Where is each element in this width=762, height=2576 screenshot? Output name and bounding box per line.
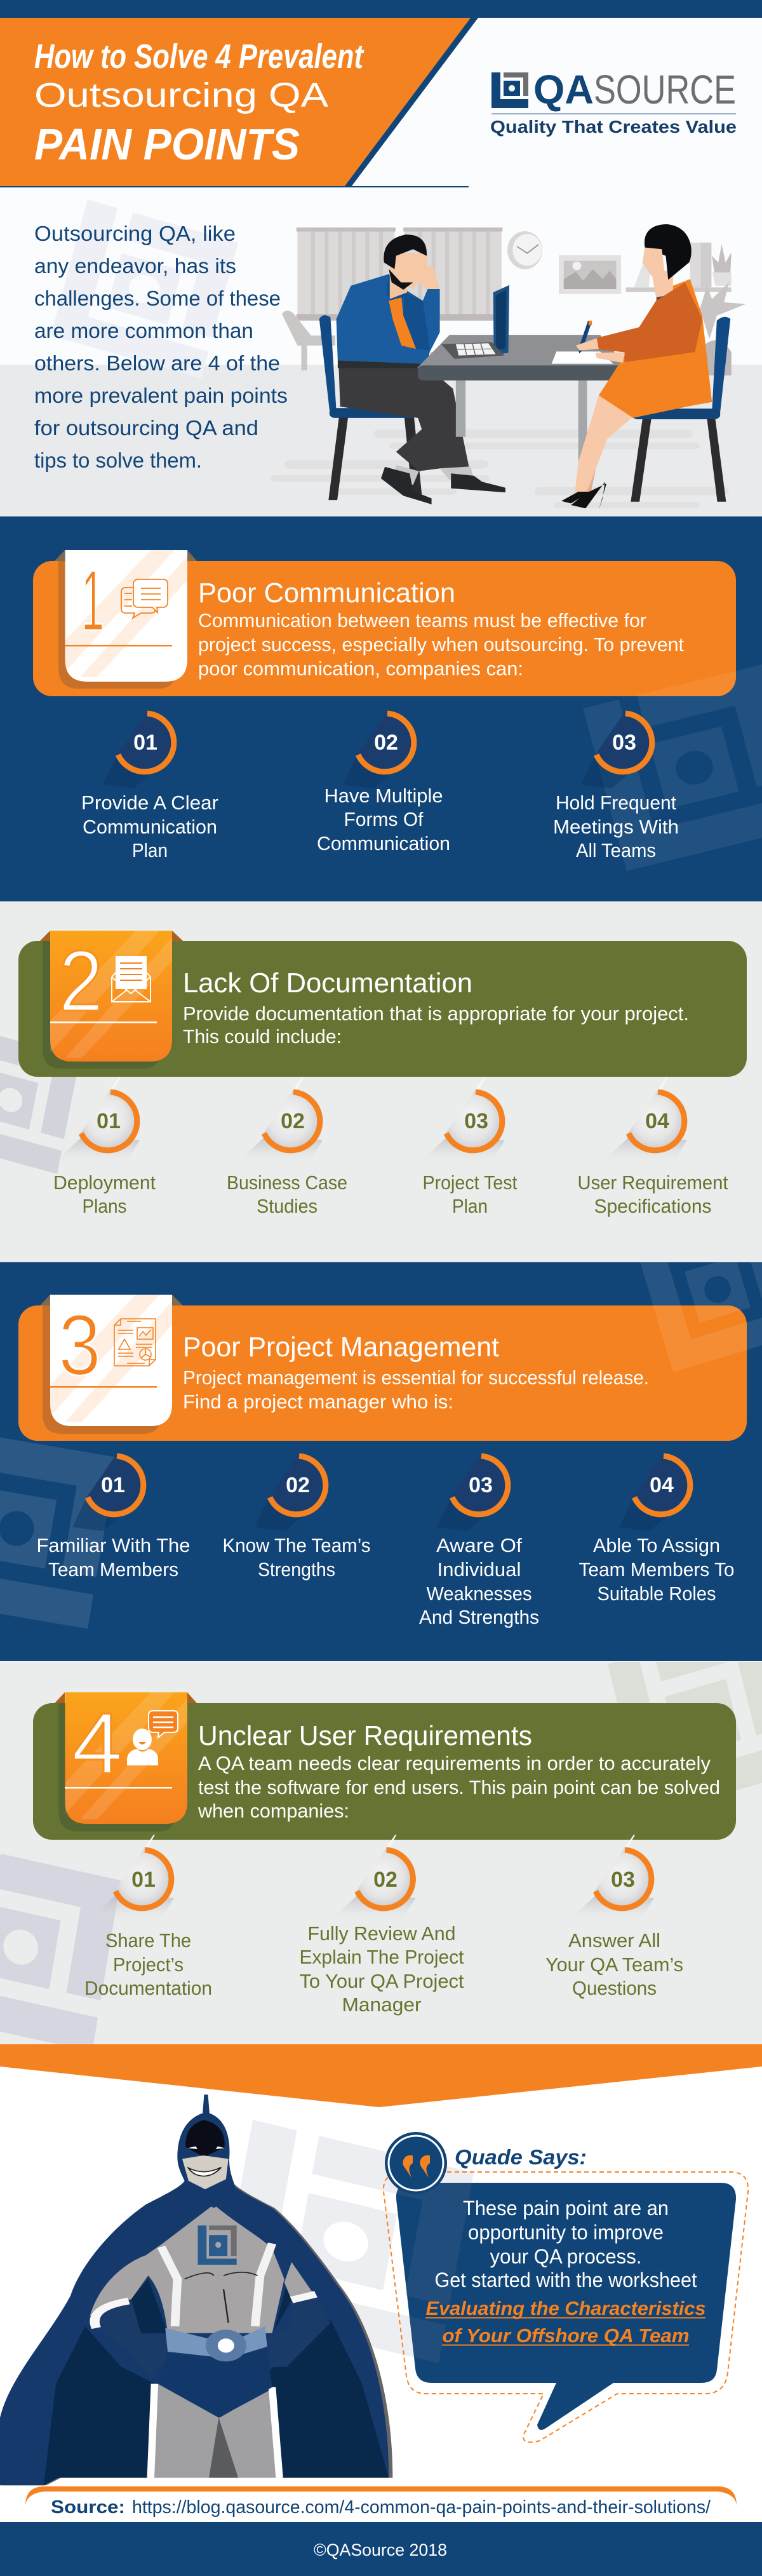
source strip: Source: [51, 2497, 125, 2518]
number card 1: 1 [81, 552, 104, 649]
item 4.2: Fully Review And [307, 1922, 456, 1945]
intro text: Outsourcing QA, like [34, 222, 236, 245]
item 1.3: All Teams [576, 839, 656, 861]
text: poor communication description [198, 609, 684, 680]
callout text: Get started with the worksheet [434, 2269, 697, 2291]
briefs [158, 2350, 272, 2418]
item 2.1: 01 [97, 1109, 121, 1133]
item 1.1: 01 [133, 731, 157, 755]
item 3.4: 04 [650, 1473, 674, 1497]
title: Outsourcing QA [34, 76, 328, 114]
item 2.2: Business Case [227, 1171, 347, 1194]
item 3.3: Weaknesses [427, 1582, 532, 1605]
item 3.3: And Strengths [419, 1606, 539, 1628]
footer: ©QASource 2018 [314, 2540, 447, 2559]
item 1.3: 03 [612, 731, 636, 755]
footer [0, 2522, 762, 2576]
number card 3 [50, 1295, 172, 1426]
text: poor project management description [183, 1366, 649, 1413]
callout text: your QA process. [490, 2245, 641, 2268]
item 3.1: 01 [101, 1473, 125, 1497]
item 3.3 [419, 1453, 539, 1628]
watermark: section 3 [0, 1207, 762, 1629]
icon: person with speech bubble [127, 1711, 178, 1765]
item 3.2: 02 [286, 1473, 310, 1497]
source strip: https://blog.qasource.com/4-common-qa-pain-points-and-their-solutions/ [132, 2497, 711, 2518]
panel: lack of documentation banner [18, 931, 747, 1077]
item 4.1: Documentation [84, 1977, 212, 1999]
callout text [425, 2197, 706, 2347]
item 3.4: Able To Assign [593, 1534, 720, 1556]
callout dashed outline [384, 2172, 748, 2442]
intro text: for outsourcing QA and [34, 416, 258, 440]
header banner [0, 0, 762, 187]
number card 2 [50, 931, 172, 1062]
item 3.3: Aware Of [436, 1534, 522, 1556]
illustration: office meeting [271, 224, 746, 510]
floor [0, 365, 762, 516]
panel: unclear user requirements banner [33, 1692, 736, 1840]
item 1.2: Have Multiple [324, 785, 443, 807]
blinds [297, 227, 502, 321]
number card 1 [65, 550, 187, 682]
man on chair [319, 234, 505, 504]
number card 4: 4 [72, 1695, 123, 1791]
item 2.3: Plan [452, 1195, 488, 1217]
picture frame [559, 255, 621, 294]
item 2.4 [578, 1077, 728, 1217]
item 4.3: Answer All [568, 1929, 660, 1952]
watermark: intro [51, 199, 238, 379]
item 3.1: Familiar With The [37, 1534, 190, 1556]
table [417, 335, 628, 480]
item 4.3: Your QA Team’s [545, 1953, 683, 1976]
clock [507, 231, 542, 269]
text: unclear user requirements description: test the software for end users. This pain point can be solved [198, 1776, 720, 1798]
item 2.4: Specifications [594, 1195, 711, 1217]
callout text: Evaluating the Characteristics [425, 2297, 706, 2319]
heading: lack of documentation: Lack Of Documentation [183, 968, 472, 999]
text: lack of documentation description [183, 1002, 689, 1048]
floor shadows [271, 429, 729, 508]
item 1.2: Communication [317, 832, 450, 854]
item 4.2: Explain The Project [300, 1946, 464, 1968]
item 4.1: 01 [131, 1868, 156, 1892]
item 1.3: Hold Frequent [556, 792, 676, 814]
number card 2: 2 [59, 933, 103, 1029]
intro text: are more common than [34, 319, 253, 342]
watermark: section 2 [0, 1035, 76, 1174]
intro text [34, 222, 288, 472]
item 3.1 [37, 1453, 190, 1581]
item 4.3: 03 [611, 1868, 635, 1892]
item 2.4: 04 [645, 1109, 669, 1133]
item 4.2: Manager [342, 1993, 422, 2016]
icon: chat bubbles [121, 579, 168, 618]
item 3.4 [579, 1453, 734, 1605]
heading: poor project management: Poor Project Management [183, 1332, 499, 1363]
item 3.4: Suitable Roles [597, 1582, 716, 1605]
cape [0, 2181, 389, 2485]
icon: envelope [112, 957, 150, 1002]
logo: QASource: Quality That Creates Value [490, 117, 737, 137]
title: PAIN POINTS [34, 119, 300, 169]
item 2.1 [52, 1077, 156, 1217]
couch [282, 311, 335, 370]
heading: poor communication: Poor Communication [198, 577, 455, 609]
torso [90, 2204, 284, 2333]
text: unclear user requirements description: A QA team needs clear requirements in order to accurately [198, 1752, 711, 1774]
item 2.1: Deployment [53, 1171, 156, 1194]
item 3.2: Strengths [258, 1558, 335, 1581]
section 3 background [0, 1262, 762, 1661]
chest logo [197, 2225, 237, 2265]
text: poor project management description: Find a project manager who is: [183, 1391, 453, 1413]
source strip [25, 2486, 737, 2518]
item 4.3: Questions [572, 1977, 657, 1999]
woman on chair [561, 224, 730, 510]
watermark: section 1 [583, 664, 762, 871]
number card 4 [65, 1692, 187, 1824]
item 2.2: 02 [281, 1109, 305, 1133]
gloves and cuffs [92, 2299, 168, 2377]
item 3.2 [222, 1453, 371, 1581]
callout text: opportunity to improve [468, 2221, 664, 2244]
laptop [441, 285, 509, 359]
icon: quote circle [385, 2132, 447, 2194]
watermark: section 4 [0, 1620, 762, 2052]
logo: QASource: QA [533, 67, 594, 112]
item 2.2 [227, 1077, 347, 1217]
item 1.2 [317, 711, 450, 854]
item 4.2: 02 [373, 1868, 398, 1892]
item 4.1: Project’s [113, 1953, 184, 1976]
callout bubble [396, 2183, 736, 2430]
item 2.2: Studies [257, 1195, 318, 1217]
intro text: more prevalent pain points [34, 384, 288, 407]
item 2.3: 03 [464, 1109, 488, 1133]
intro text: tips to solve them. [34, 448, 202, 472]
item 3.3: 03 [469, 1473, 493, 1497]
item 1.3 [553, 711, 679, 861]
title: How to Solve 4 Prevalent [34, 37, 364, 76]
item 2.3: Project Test [423, 1171, 518, 1194]
item 3.3: Individual [437, 1558, 521, 1581]
text: poor communication description: project success, especially when outsourcing. To prevent [198, 633, 684, 656]
text: poor communication description: poor communication, companies can: [198, 657, 523, 680]
heading: Quade Says: Quade Says: [455, 2145, 587, 2169]
heading: unclear user requirements: Unclear User Requirements [198, 1720, 532, 1751]
belt [165, 2326, 267, 2361]
item 1.2: 02 [374, 731, 398, 755]
item 2.4: User Requirement [578, 1171, 728, 1194]
section 2 background [0, 902, 762, 1262]
watermark: closing section [218, 2120, 474, 2363]
callout text: of Your Offshore QA Team [442, 2324, 690, 2347]
section 4 background [0, 1662, 762, 2044]
item 3.1: Team Members [48, 1558, 178, 1581]
item 4.2 [300, 1835, 464, 2016]
closing section background with orange chevron [0, 2044, 762, 2522]
text: poor communication description: Communication between teams must be effective for [198, 609, 646, 631]
item 4.1: Share The [105, 1929, 191, 1952]
item 3.2: Know The Team’s [222, 1534, 371, 1556]
mascot: Quade superhero [0, 2094, 392, 2485]
text: lack of documentation description: This could include: [183, 1025, 342, 1048]
text: unclear user requirements description: when companies: [197, 1800, 349, 1822]
panel: poor communication banner [33, 550, 736, 696]
item 2.3 [417, 1077, 518, 1217]
icon: report document [114, 1319, 156, 1366]
intro text: challenges. Some of these [34, 287, 281, 310]
paper and pen [552, 321, 613, 364]
legs [150, 2384, 218, 2478]
logo: QASource [490, 67, 737, 137]
item 1.1: Provide A Clear [81, 792, 218, 814]
item 1.1 [81, 711, 218, 861]
item 1.2: Forms Of [344, 808, 424, 830]
item 1.3: Meetings With [553, 816, 679, 838]
panel: poor project management banner [18, 1295, 747, 1441]
text: lack of documentation description: Provide documentation that is appropriate for your project. [183, 1002, 689, 1025]
item 3.4: Team Members To [579, 1558, 734, 1581]
item 4.3 [545, 1835, 683, 1999]
text: unclear user requirements description [197, 1752, 720, 1822]
callout text: These pain point are an [463, 2197, 669, 2220]
item 2.1: Plans [83, 1195, 127, 1217]
intro text: others. Below are 4 of the [34, 351, 280, 375]
text: poor project management description: Project management is essential for successful release. [183, 1366, 649, 1389]
shelf with binders and plant [626, 243, 746, 375]
head [177, 2094, 238, 2208]
item 4.2: To Your QA Project [300, 1970, 464, 1992]
section 1 background [0, 516, 762, 901]
item 1.1: Communication [83, 816, 217, 838]
number card 3: 3 [58, 1297, 101, 1393]
item 4.1 [84, 1835, 212, 1999]
intro text: any endeavor, has its [34, 254, 236, 278]
item 1.1: Plan [132, 839, 168, 861]
title [34, 37, 364, 169]
